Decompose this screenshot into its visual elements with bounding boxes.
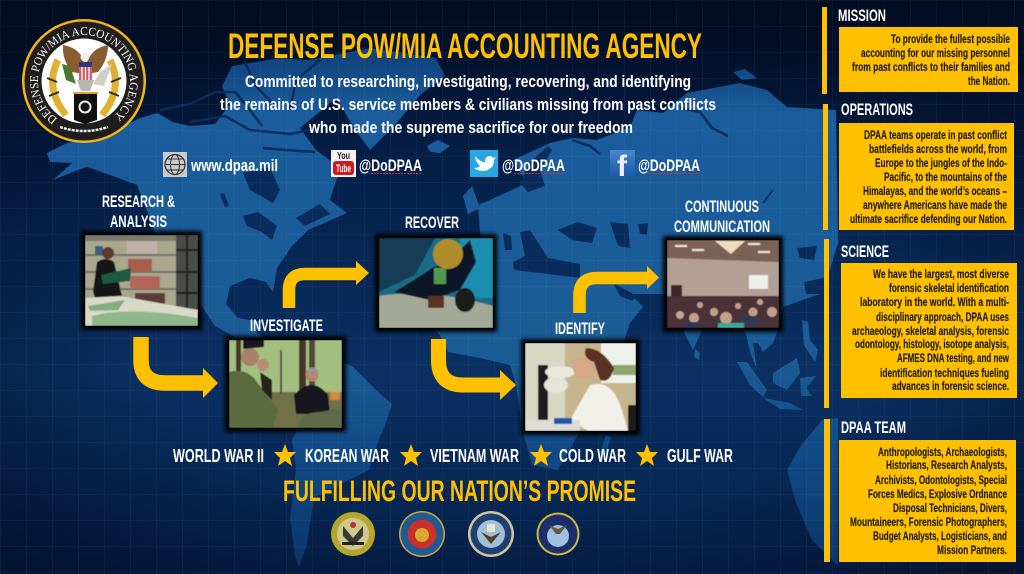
icon: YouTube [331, 150, 356, 177]
conflicts row: COLD WAR [559, 446, 626, 466]
map: India tip [682, 328, 703, 350]
panel: science [824, 239, 1017, 408]
subtitle: the remains of U.S. service members & civilians missing from past conflicts [220, 95, 716, 114]
conflicts row: KOREAN WAR [305, 446, 389, 466]
icon: globe [163, 152, 187, 177]
sea: Lake Winnipeg [220, 193, 229, 207]
world map [47, 48, 838, 567]
seal: Army [331, 512, 375, 556]
panel: mission [822, 7, 1018, 94]
map: Madagascar [598, 435, 611, 460]
step label: continuous communication: CONTINUOUS [685, 198, 759, 216]
mission text [852, 34, 1010, 88]
step label: identify: IDENTIFY [555, 320, 605, 338]
seal: Navy [468, 511, 514, 557]
icon: YouTube: You [337, 151, 350, 162]
sea: East China Sea [804, 278, 824, 294]
conflicts row [173, 444, 733, 466]
sea: Aral Sea [638, 223, 648, 235]
seal: Air Force [536, 512, 580, 556]
seal POW/MIA shield [74, 94, 97, 124]
map: Sumatra [737, 362, 767, 397]
map: Borneo [773, 358, 800, 390]
step label: recover: RECOVER [405, 214, 459, 232]
step label: research and analysis: RESEARCH & [102, 193, 175, 211]
science text [852, 269, 1009, 393]
map: Sri Lanka [694, 349, 700, 360]
arrow: research to investigate [141, 337, 218, 398]
service seals [331, 511, 580, 557]
map: Svalbard [733, 69, 757, 80]
seal laurel wreath [47, 60, 121, 115]
science heading: SCIENCE [841, 243, 889, 261]
photo: investigators in forest [225, 336, 346, 432]
photo: researcher in library [81, 231, 202, 330]
sea: western Mediterranean [503, 233, 512, 250]
map: Greenland [300, 48, 445, 150]
sea: Baltic [520, 146, 552, 192]
website link: www.dpaa.mil [190, 156, 278, 175]
map: Java [763, 398, 803, 410]
sea: Yellow Sea [797, 246, 817, 260]
icon: Twitter [470, 150, 498, 177]
map: Philippines [802, 320, 818, 362]
promise heading: FULFILLING OUR NATION’S PROMISE [283, 475, 636, 508]
sea: Persian Gulf [613, 283, 637, 301]
agency seal [22, 19, 146, 143]
conflicts row: VIETNAM WAR [430, 446, 519, 466]
step label: investigate: INVESTIGATE [250, 317, 323, 335]
step label: research and analysis: ANALYSIS [110, 213, 167, 231]
YouTube link: @DoDPAA [359, 156, 422, 175]
step label: continuous communication: COMMUNICATION [674, 218, 770, 236]
operations heading: OPERATIONS [841, 101, 913, 119]
icon: star [530, 444, 552, 466]
step label: research and analysis [102, 193, 175, 231]
arrow: investigate to recover [289, 261, 369, 308]
Facebook link [610, 150, 700, 183]
panel: operations [823, 101, 1014, 230]
icon: star [400, 444, 422, 466]
conflicts row: GULF WAR [667, 446, 733, 466]
photo: scientist at microscope [521, 339, 640, 435]
map: Indochina [745, 330, 778, 370]
seal ring text: DEFENSE POW/MIA ACCOUNTING AGENCY [30, 27, 138, 125]
map: Iceland [427, 140, 450, 153]
subtitle [220, 72, 716, 137]
map: Australia [787, 418, 838, 566]
arrow: recover to identify [438, 339, 516, 400]
icon: Facebook: f [617, 150, 628, 183]
Facebook link: @DoDPAA [638, 156, 700, 175]
Twitter link: @DoDPAA [502, 156, 565, 175]
mission heading: MISSION [838, 7, 886, 25]
conflicts row: WORLD WAR II [173, 446, 264, 466]
team text [850, 447, 1007, 557]
team heading: DPAA TEAM [841, 419, 906, 437]
sea: Great Lakes [243, 212, 277, 240]
map: South America [290, 362, 392, 567]
map: arctic channels [160, 60, 773, 203]
seal eagle [62, 45, 112, 91]
icon: star [636, 444, 658, 466]
icon: star [274, 444, 296, 466]
Twitter link [470, 150, 565, 177]
subtitle: who made the supreme sacrifice for our freedom [308, 118, 633, 137]
sea: Hudson Bay [243, 167, 280, 203]
step label: continuous communication [674, 198, 770, 236]
map: inland seas and channels [220, 146, 824, 301]
seal chain [60, 127, 108, 131]
icon: YouTube: Tube [336, 163, 351, 175]
photo: diver underwater [375, 234, 497, 332]
sea: Gulf of St Lawrence [296, 204, 330, 226]
title: DEFENSE POW/MIA ACCOUNTING AGENCY [228, 27, 702, 66]
operations text [850, 130, 1007, 226]
YouTube link [331, 150, 422, 177]
map: Sulawesi [800, 376, 816, 396]
map: Great Britain [463, 186, 480, 214]
map: Eurasia [478, 83, 838, 326]
map: North America [47, 58, 347, 352]
subtitle: Committed to researching, investigating, recovering, and identifying [245, 72, 691, 91]
website link [163, 152, 278, 177]
arrow: identify to communication [580, 266, 659, 313]
panel: DPAA team [824, 419, 1016, 562]
sea: Mediterranean [513, 230, 580, 278]
sea: Black Sea [558, 222, 597, 243]
photo: conference audience [663, 236, 783, 332]
seal: Marine Corps [399, 511, 445, 557]
sea: Caspian Sea [610, 222, 630, 248]
map: Africa [400, 240, 643, 470]
